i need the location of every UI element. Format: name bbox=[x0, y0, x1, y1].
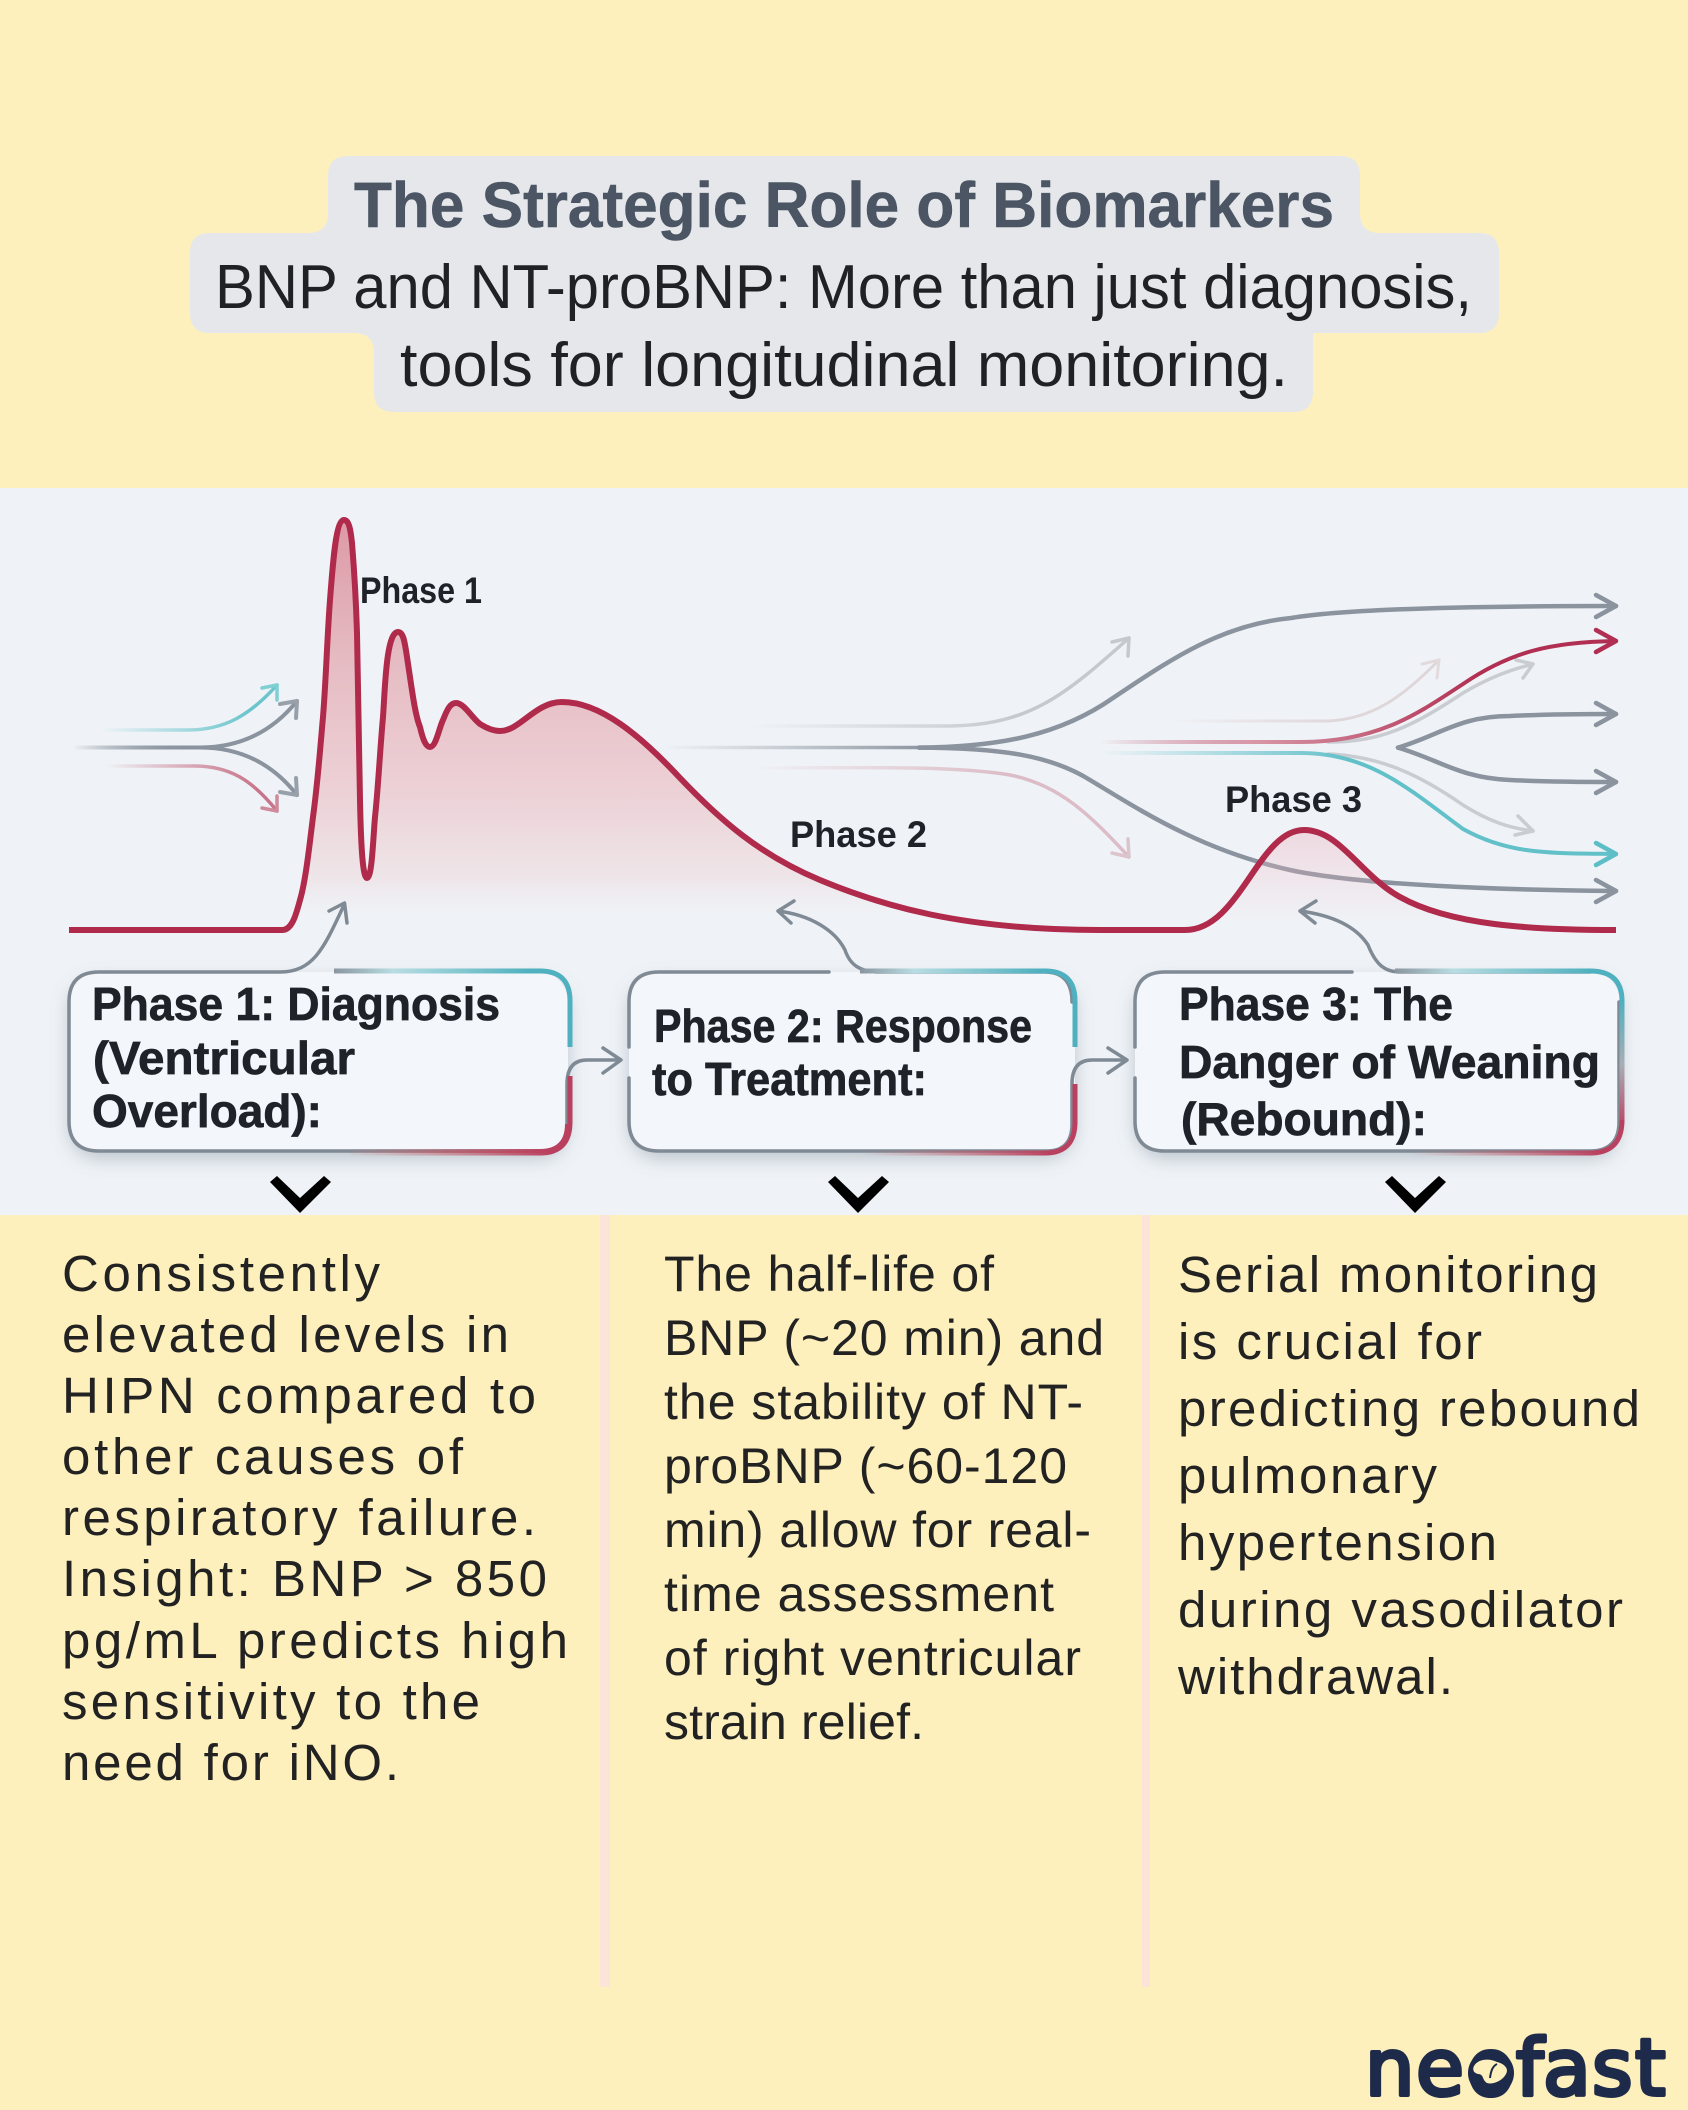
text block: column 2: strain relief. bbox=[664, 1694, 924, 1750]
heading: The Strategic Role of Biomarkers bbox=[354, 169, 1334, 241]
heading: Phase 1: Overload): bbox=[92, 1085, 322, 1137]
title block bbox=[190, 156, 1499, 412]
icon: embryo in logo o bbox=[1468, 2050, 1514, 2096]
label: Phase 1: Phase 1 bbox=[360, 570, 482, 611]
panel: Phase 2 box bbox=[629, 901, 1127, 1153]
text block: column 1: need for iNO. bbox=[62, 1734, 399, 1791]
chart: BNP curve and pathway arrows bbox=[69, 520, 1616, 930]
icon: chevron 3 bbox=[1385, 1176, 1446, 1213]
text block: column 1: HIPN compared to bbox=[62, 1367, 536, 1424]
panel: Phase 3 box bbox=[1135, 901, 1622, 1153]
text block: column 3: pulmonary bbox=[1178, 1447, 1438, 1504]
text block: column 2: time assessment bbox=[664, 1566, 1054, 1622]
panel: diagram band bbox=[0, 488, 1688, 1215]
BNP curve bbox=[69, 520, 1616, 930]
area under curve bbox=[282, 520, 910, 930]
text block: column 2 bbox=[664, 1246, 1104, 1750]
text block: column 3 bbox=[1177, 1246, 1640, 1705]
heading: Phase 3: Phase 3: The bbox=[1179, 978, 1453, 1030]
text block: column 2: proBNP (~60-120 bbox=[664, 1438, 1067, 1494]
heading: Phase 2: Phase 2: Response bbox=[654, 1000, 1032, 1052]
text block: column 2: the stability of NT- bbox=[664, 1374, 1083, 1430]
text block: column 3: withdrawal. bbox=[1177, 1648, 1453, 1705]
text block: column 1: respiratory failure. bbox=[62, 1489, 536, 1546]
subtitle line 1: BNP and NT-proBNP: More than just diagnosis, bbox=[215, 253, 1472, 322]
text block: column 3: predicting rebound bbox=[1178, 1380, 1640, 1437]
heading: Phase 2 bbox=[652, 1000, 1032, 1105]
column dividers bbox=[600, 1215, 1150, 1987]
icon: chevron 2 bbox=[828, 1176, 889, 1213]
text block: column 3: Serial monitoring bbox=[1178, 1246, 1598, 1303]
text block: column 3: during vasodilator bbox=[1178, 1581, 1623, 1638]
text block: column 1: Consistently bbox=[62, 1245, 380, 1302]
text block: column 2: The half-life of bbox=[664, 1246, 994, 1302]
label: Phase 3: Phase 3 bbox=[1225, 779, 1362, 820]
pathway arrows: left fan bbox=[73, 685, 297, 811]
text block: column 1: sensitivity to the bbox=[62, 1673, 480, 1730]
heading: Phase 3: (Rebound): bbox=[1181, 1093, 1427, 1145]
label: Phase 2: Phase 2 bbox=[790, 814, 927, 855]
heading: Phase 1: (Ventricular bbox=[93, 1032, 355, 1084]
text block: column 3: hypertension bbox=[1178, 1514, 1497, 1571]
text block: column 3: is crucial for bbox=[1178, 1313, 1482, 1370]
subtitle line 2: tools for longitudinal monitoring. bbox=[400, 331, 1288, 400]
text block: column 2: BNP (~20 min) and bbox=[664, 1310, 1104, 1366]
heading: Phase 1: Phase 1: Diagnosis bbox=[92, 978, 500, 1030]
text block: column 1: other causes of bbox=[62, 1428, 464, 1485]
heading: Phase 1 bbox=[92, 978, 500, 1137]
heading: Phase 2: to Treatment: bbox=[652, 1053, 927, 1105]
text block: column 2: min) allow for real- bbox=[664, 1502, 1091, 1558]
heading: Phase 3: Danger of Weaning bbox=[1179, 1036, 1600, 1088]
icon: chevron 1 bbox=[270, 1176, 331, 1213]
pathway arrows: middle fan bbox=[662, 595, 1616, 902]
text block: column 1: elevated levels in bbox=[62, 1306, 509, 1363]
text block: column 1: Insight: BNP > 850 bbox=[62, 1550, 547, 1607]
text block: column 1 bbox=[62, 1245, 568, 1791]
text block: column 1: pg/mL predicts high bbox=[62, 1612, 568, 1669]
pathway arrows: right fan bbox=[1102, 630, 1616, 865]
panel: Phase 1 box bbox=[69, 903, 621, 1153]
heading: Phase 3 bbox=[1179, 978, 1600, 1145]
area under phase 3 rebound bbox=[1200, 830, 1470, 930]
title backdrop pills bbox=[190, 156, 1499, 412]
text block: column 2: of right ventricular bbox=[664, 1630, 1081, 1686]
